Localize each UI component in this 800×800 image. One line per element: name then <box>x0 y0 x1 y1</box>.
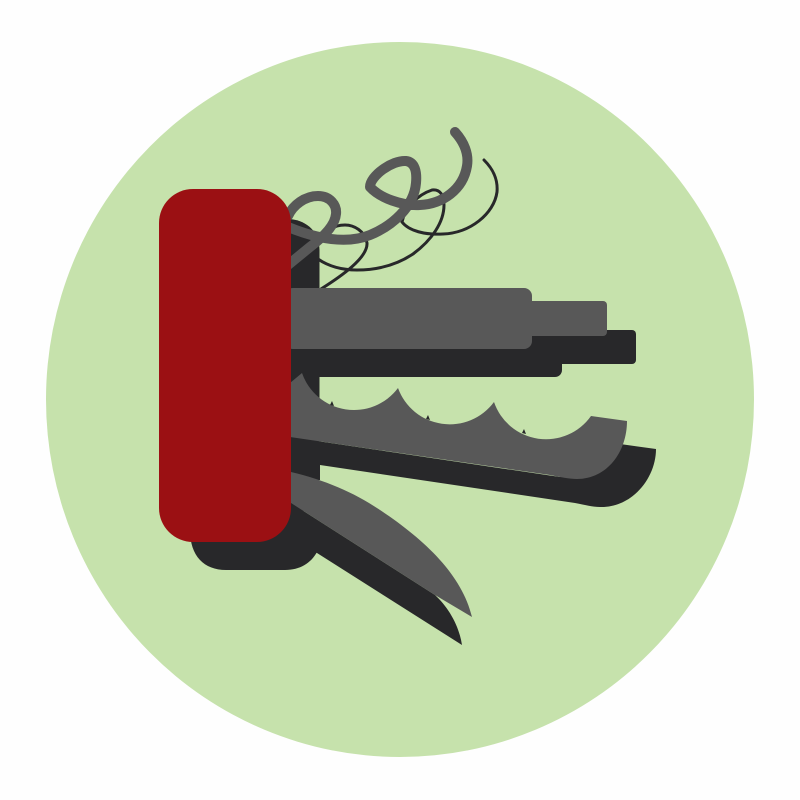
gray serrated blade <box>290 373 627 479</box>
serration marks <box>330 401 526 434</box>
dark lower blade <box>291 503 462 645</box>
thick gray corkscrew <box>288 132 467 265</box>
thin dark corkscrew wire <box>318 160 497 289</box>
dark rear handle <box>190 500 317 570</box>
dark lower flat bar <box>290 340 562 377</box>
background circle <box>46 42 754 757</box>
icon: multi-tool knife <box>159 132 656 645</box>
dark narrow bar tip <box>500 330 636 364</box>
dark tool post <box>290 219 320 480</box>
gray main bar <box>285 288 532 349</box>
gray narrow bar tip <box>500 301 607 336</box>
red front handle <box>159 189 291 542</box>
dark large blade <box>290 437 656 507</box>
gray lower blade <box>291 472 472 617</box>
